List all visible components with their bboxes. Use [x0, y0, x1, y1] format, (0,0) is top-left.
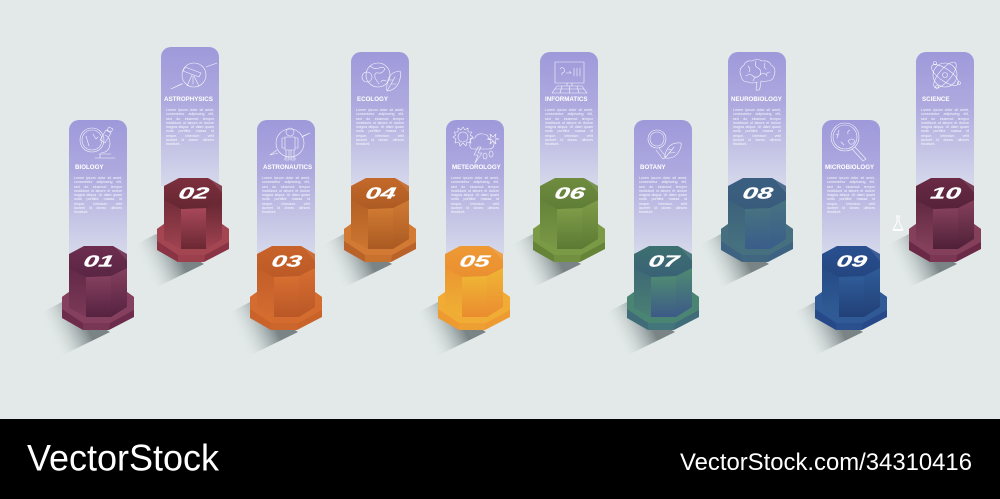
body text: tincidunt.	[733, 142, 747, 146]
body text: nulla porttitor massa id	[451, 197, 499, 201]
body text: magna aliqua. Ut diam quam	[639, 193, 687, 197]
body text: neque. Interdum velit	[827, 202, 875, 206]
footer text: VectorStock.com/34310416	[680, 449, 972, 476]
body text	[733, 108, 781, 146]
body text: nulla porttitor massa id	[166, 129, 214, 133]
pedestal 09	[815, 246, 887, 330]
body text: magna aliqua. Ut diam quam	[733, 125, 781, 129]
column 07: botany	[627, 120, 699, 330]
label: NEUROBIOLOGY	[731, 96, 782, 103]
body text: sed do eiusmod tempor	[545, 117, 593, 121]
body text	[921, 108, 969, 146]
body text	[74, 176, 122, 214]
pedestal 03	[250, 246, 322, 330]
icon: computer monitor and keyboard	[552, 62, 588, 94]
card: biology	[69, 120, 127, 254]
body text: tincidunt.	[827, 210, 841, 214]
body text: magna aliqua. Ut diam quam	[166, 125, 214, 129]
body text: incididunt ut labore et dolore	[166, 121, 214, 125]
body text: neque. Interdum velit	[451, 202, 499, 206]
pedestal 10	[909, 178, 981, 262]
body text: Lorem ipsum dolor sit amet,	[451, 176, 499, 180]
icon: brain	[740, 59, 776, 90]
body text: magna aliqua. Ut diam quam	[451, 193, 499, 197]
body text: nulla porttitor massa id	[921, 129, 969, 133]
icon: sun, cloud and lightning	[452, 126, 500, 164]
body text: consectetur adipiscing elit,	[827, 180, 875, 184]
card: informatics	[540, 52, 598, 186]
body text: nulla porttitor massa id	[639, 197, 687, 201]
label: BOTANY	[640, 164, 666, 171]
body text	[356, 108, 404, 146]
body text: neque. Interdum velit	[262, 202, 310, 206]
body text: laoreet id donec ultrices	[733, 138, 781, 142]
card: astronautics	[257, 120, 315, 254]
body text: incididunt ut labore et dolore	[451, 189, 499, 193]
body text: consectetur adipiscing elit,	[262, 180, 310, 184]
body text: consectetur adipiscing elit,	[639, 180, 687, 184]
body text: incididunt ut labore et dolore	[545, 121, 593, 125]
card: meteorology	[446, 120, 504, 254]
body text: sed do eiusmod tempor	[262, 185, 310, 189]
icon: atom	[931, 61, 961, 89]
body text: consectetur adipiscing elit,	[921, 112, 969, 116]
body text: sed do eiusmod tempor	[356, 117, 404, 121]
body text: magna aliqua. Ut diam quam	[921, 125, 969, 129]
body text: tincidunt.	[545, 142, 559, 146]
pedestal 09: 09	[835, 253, 868, 270]
body text: Lorem ipsum dolor sit amet,	[74, 176, 122, 180]
pedestal 07: 07	[647, 253, 682, 270]
label: SCIENCE	[922, 96, 950, 103]
body text: tincidunt.	[356, 142, 370, 146]
body text: magna aliqua. Ut diam quam	[74, 193, 122, 197]
body text: tincidunt.	[262, 210, 276, 214]
body text: laoreet id donec ultrices	[166, 138, 214, 142]
body text: Lorem ipsum dolor sit amet,	[262, 176, 310, 180]
body text: nulla porttitor massa id	[74, 197, 122, 201]
pedestal 04	[344, 178, 416, 262]
column 04: ecology	[344, 52, 416, 262]
body text: sed do eiusmod tempor	[451, 185, 499, 189]
column 10: science	[909, 52, 981, 262]
body text: consectetur adipiscing elit,	[733, 112, 781, 116]
icon: petri dish and microscope	[80, 126, 116, 158]
body text: tincidunt.	[639, 210, 653, 214]
body text: consectetur adipiscing elit,	[166, 112, 214, 116]
body text: tincidunt.	[74, 210, 88, 214]
body text: neque. Interdum velit	[639, 202, 687, 206]
icon: magnifier and leaf	[648, 130, 682, 160]
body text: consectetur adipiscing elit,	[74, 180, 122, 184]
pedestal 03: 03	[270, 253, 303, 270]
footer text	[0, 419, 1000, 499]
body text: magna aliqua. Ut diam quam	[545, 125, 593, 129]
column 06: informatics	[533, 52, 605, 262]
icon: globe and leaf	[362, 62, 402, 92]
pedestal 02: 02	[177, 185, 210, 202]
body text: laoreet id donec ultrices	[827, 206, 875, 210]
body text: sed do eiusmod tempor	[166, 117, 214, 121]
body text: Lorem ipsum dolor sit amet,	[166, 108, 214, 112]
body text: Lorem ipsum dolor sit amet,	[639, 176, 687, 180]
body text: neque. Interdum velit	[74, 202, 122, 206]
body text: consectetur adipiscing elit,	[451, 180, 499, 184]
body text: laoreet id donec ultrices	[262, 206, 310, 210]
body text: incididunt ut labore et dolore	[74, 189, 122, 193]
column 08: neurobiology	[721, 52, 793, 262]
body text	[545, 108, 593, 146]
column 01: biology	[62, 120, 134, 330]
body text: laoreet id donec ultrices	[74, 206, 122, 210]
pedestal 08	[721, 178, 793, 262]
body text: laoreet id donec ultrices	[639, 206, 687, 210]
pedestal 01	[62, 246, 134, 330]
body text: neque. Interdum velit	[166, 134, 214, 138]
label: MICROBIOLOGY	[825, 164, 874, 171]
body text: magna aliqua. Ut diam quam	[262, 193, 310, 197]
card: astrophysics	[161, 47, 219, 186]
pedestal 01: 01	[82, 253, 115, 270]
pedestal 06	[533, 178, 605, 262]
body text: incididunt ut labore et dolore	[827, 189, 875, 193]
label: ASTROPHYSICS	[164, 96, 213, 103]
body text: Lorem ipsum dolor sit amet,	[921, 108, 969, 112]
body text: nulla porttitor massa id	[356, 129, 404, 133]
card: microbiology	[822, 120, 880, 254]
body text: neque. Interdum velit	[733, 134, 781, 138]
pedestal 02	[157, 178, 229, 262]
body text: laoreet id donec ultrices	[921, 138, 969, 142]
pedestal 04: 04	[364, 185, 397, 202]
body text: consectetur adipiscing elit,	[356, 112, 404, 116]
column 05: meteorology	[438, 120, 510, 330]
label: BIOLOGY	[75, 164, 104, 171]
body text: nulla porttitor massa id	[545, 129, 593, 133]
body text: tincidunt.	[166, 142, 180, 146]
body text: neque. Interdum velit	[356, 134, 404, 138]
footer bar	[0, 419, 1000, 499]
body text	[451, 176, 499, 214]
body text: sed do eiusmod tempor	[827, 185, 875, 189]
body text: magna aliqua. Ut diam quam	[356, 125, 404, 129]
body text	[166, 108, 214, 146]
label: METEOROLOGY	[452, 164, 501, 171]
body text	[262, 176, 310, 214]
body text: incididunt ut labore et dolore	[921, 121, 969, 125]
body text: incididunt ut labore et dolore	[733, 121, 781, 125]
card: botany	[634, 120, 692, 254]
body text: nulla porttitor massa id	[827, 197, 875, 201]
body text: Lorem ipsum dolor sit amet,	[733, 108, 781, 112]
body text: laoreet id donec ultrices	[545, 138, 593, 142]
footer text: VectorStock	[27, 438, 219, 478]
body text: neque. Interdum velit	[921, 134, 969, 138]
body text: sed do eiusmod tempor	[733, 117, 781, 121]
body text: Lorem ipsum dolor sit amet,	[356, 108, 404, 112]
body text: incididunt ut labore et dolore	[639, 189, 687, 193]
column 09: microbiology	[815, 120, 887, 330]
label: ECOLOGY	[357, 96, 388, 103]
body text	[639, 176, 687, 214]
body text: magna aliqua. Ut diam quam	[827, 193, 875, 197]
body text	[827, 176, 875, 214]
body text: incididunt ut labore et dolore	[262, 189, 310, 193]
icon: magnifier with microbes	[830, 122, 866, 162]
card: neurobiology	[728, 52, 786, 186]
pedestal 05: 05	[458, 253, 493, 270]
card: science	[916, 52, 974, 186]
label: ASTRONAUTICS	[263, 164, 312, 171]
label: INFORMATICS	[545, 96, 588, 103]
body text: laoreet id donec ultrices	[451, 206, 499, 210]
body text: nulla porttitor massa id	[262, 197, 310, 201]
pedestal 06: 06	[553, 185, 588, 202]
pedestal 05	[438, 246, 510, 330]
body text: Lorem ipsum dolor sit amet,	[545, 108, 593, 112]
body text: sed do eiusmod tempor	[921, 117, 969, 121]
body text: tincidunt.	[451, 210, 465, 214]
pedestal 07	[627, 246, 699, 330]
column 03: astronautics	[250, 120, 322, 330]
body text: sed do eiusmod tempor	[639, 185, 687, 189]
pedestal 08: 08	[741, 185, 774, 202]
body text: neque. Interdum velit	[545, 134, 593, 138]
body text: incididunt ut labore et dolore	[356, 121, 404, 125]
body text: consectetur adipiscing elit,	[545, 112, 593, 116]
body text: nulla porttitor massa id	[733, 129, 781, 133]
icon: astronaut and planet	[270, 128, 310, 160]
card: ecology	[351, 52, 409, 186]
body text: tincidunt.	[921, 142, 935, 146]
icon: telescope and planet	[170, 62, 218, 90]
body text: Lorem ipsum dolor sit amet,	[827, 176, 875, 180]
body text: laoreet id donec ultrices	[356, 138, 404, 142]
pedestal 10: 10	[929, 185, 962, 202]
icon: small flask	[892, 215, 904, 233]
column 02: astrophysics	[157, 47, 229, 262]
body text: sed do eiusmod tempor	[74, 185, 122, 189]
